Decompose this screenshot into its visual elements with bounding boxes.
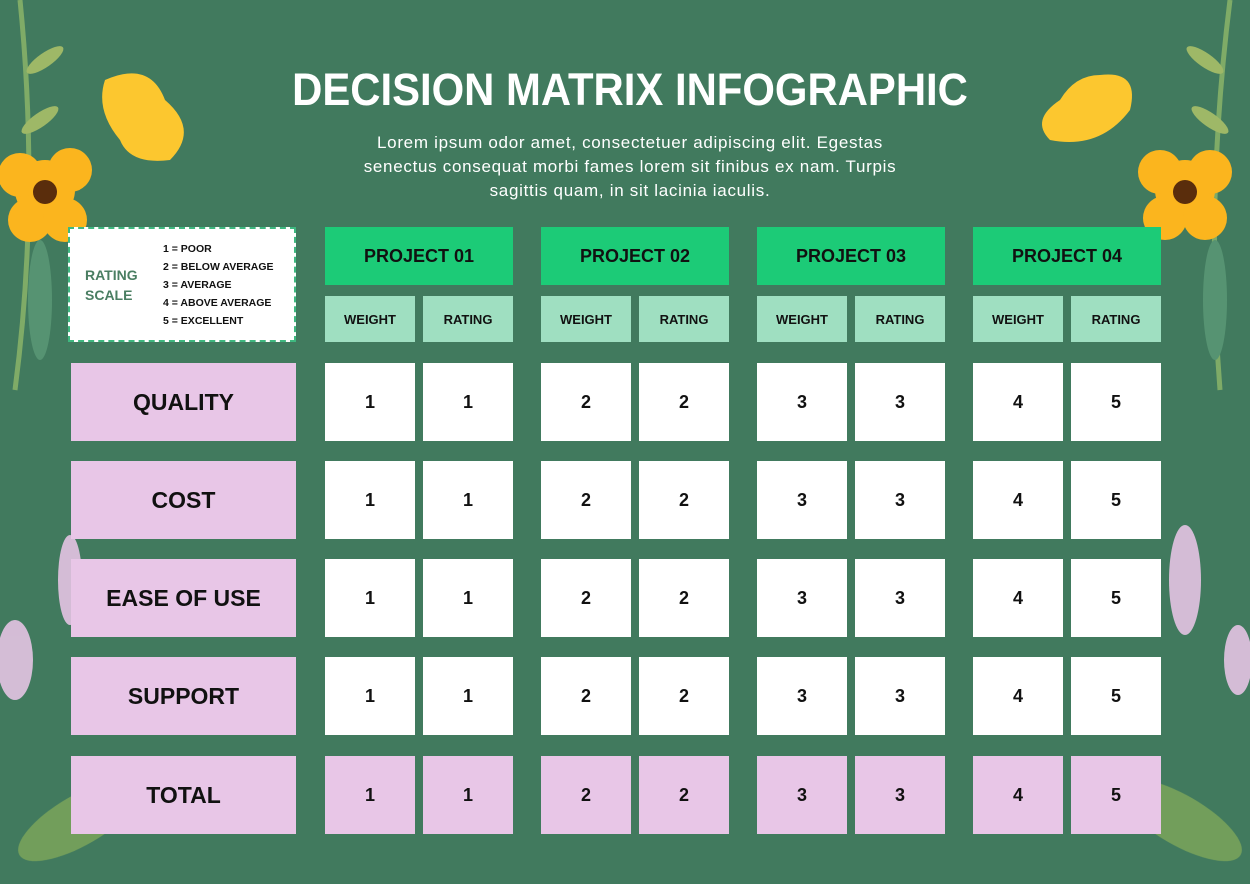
text: 2 xyxy=(679,686,689,706)
text: 2 xyxy=(581,490,591,510)
subtitle: Lorem ipsum odor amet, consectetuer adipiscing elit. Egestas xyxy=(377,133,883,152)
text: 1 xyxy=(365,686,375,706)
text: WEIGHT xyxy=(560,312,612,326)
text: WEIGHT xyxy=(344,312,396,326)
text: WEIGHT xyxy=(992,312,1044,326)
text: 4 xyxy=(1013,392,1023,412)
text: 3 xyxy=(895,392,905,412)
title: DECISION MATRIX INFOGRAPHIC xyxy=(292,64,968,115)
rating scale list: 4 = ABOVE AVERAGE xyxy=(163,296,271,308)
text: PROJECT 01 xyxy=(364,246,474,266)
matrix cells xyxy=(325,363,1161,834)
text: 5 xyxy=(1111,392,1121,412)
row labels xyxy=(71,363,296,834)
text: COST xyxy=(152,486,215,512)
text: 4 xyxy=(1013,784,1023,804)
text: 4 xyxy=(1013,490,1023,510)
text: 2 xyxy=(679,392,689,412)
rating scale list xyxy=(163,242,274,326)
text: TOTAL xyxy=(146,782,221,808)
text: 2 xyxy=(581,686,591,706)
project headers xyxy=(325,227,1161,342)
text: 5 xyxy=(1111,490,1121,510)
text: 2 xyxy=(679,588,689,608)
text: RATING xyxy=(1092,312,1140,326)
text: 4 xyxy=(1013,686,1023,706)
text: WEIGHT xyxy=(776,312,828,326)
text: PROJECT 04 xyxy=(1012,246,1122,266)
text: RATING xyxy=(876,312,924,326)
text: 3 xyxy=(797,588,807,608)
rating scale list: 5 = EXCELLENT xyxy=(163,314,243,326)
text: 1 xyxy=(463,686,473,706)
rating scale list: 3 = AVERAGE xyxy=(163,278,232,290)
rating scale label: RATING xyxy=(85,266,138,282)
text: 3 xyxy=(895,490,905,510)
text: 3 xyxy=(797,686,807,706)
rating scale list: 2 = BELOW AVERAGE xyxy=(163,260,274,272)
text: 1 xyxy=(463,392,473,412)
text: 3 xyxy=(895,686,905,706)
text: 3 xyxy=(895,784,905,804)
text: 1 xyxy=(463,490,473,510)
text: 5 xyxy=(1111,686,1121,706)
text: 2 xyxy=(679,784,689,804)
text: 2 xyxy=(679,490,689,510)
text: QUALITY xyxy=(133,388,234,414)
text: SUPPORT xyxy=(128,682,239,708)
rating scale box xyxy=(68,227,296,342)
text: 3 xyxy=(797,784,807,804)
text: 1 xyxy=(463,588,473,608)
text: EASE OF USE xyxy=(106,584,261,610)
text: 1 xyxy=(463,784,473,804)
text: PROJECT 02 xyxy=(580,246,690,266)
text: 1 xyxy=(365,588,375,608)
text: PROJECT 03 xyxy=(796,246,906,266)
text: RATING xyxy=(444,312,492,326)
text: 2 xyxy=(581,588,591,608)
text: 5 xyxy=(1111,784,1121,804)
text: 2 xyxy=(581,392,591,412)
rating scale label xyxy=(85,266,138,302)
text: 1 xyxy=(365,490,375,510)
subtitle xyxy=(364,133,896,200)
text: RATING xyxy=(660,312,708,326)
rating scale list: 1 = POOR xyxy=(163,242,212,254)
text: 4 xyxy=(1013,588,1023,608)
subtitle: sagittis quam, in sit lacinia iaculis. xyxy=(490,181,770,200)
text: 2 xyxy=(581,784,591,804)
text: 3 xyxy=(797,392,807,412)
subtitle: senectus consequat morbi fames lorem sit finibus ex nam. Turpis xyxy=(364,157,896,176)
text: 5 xyxy=(1111,588,1121,608)
text: 1 xyxy=(365,392,375,412)
text: 3 xyxy=(895,588,905,608)
text: 3 xyxy=(797,490,807,510)
text: 1 xyxy=(365,784,375,804)
rating scale label: SCALE xyxy=(85,286,132,302)
